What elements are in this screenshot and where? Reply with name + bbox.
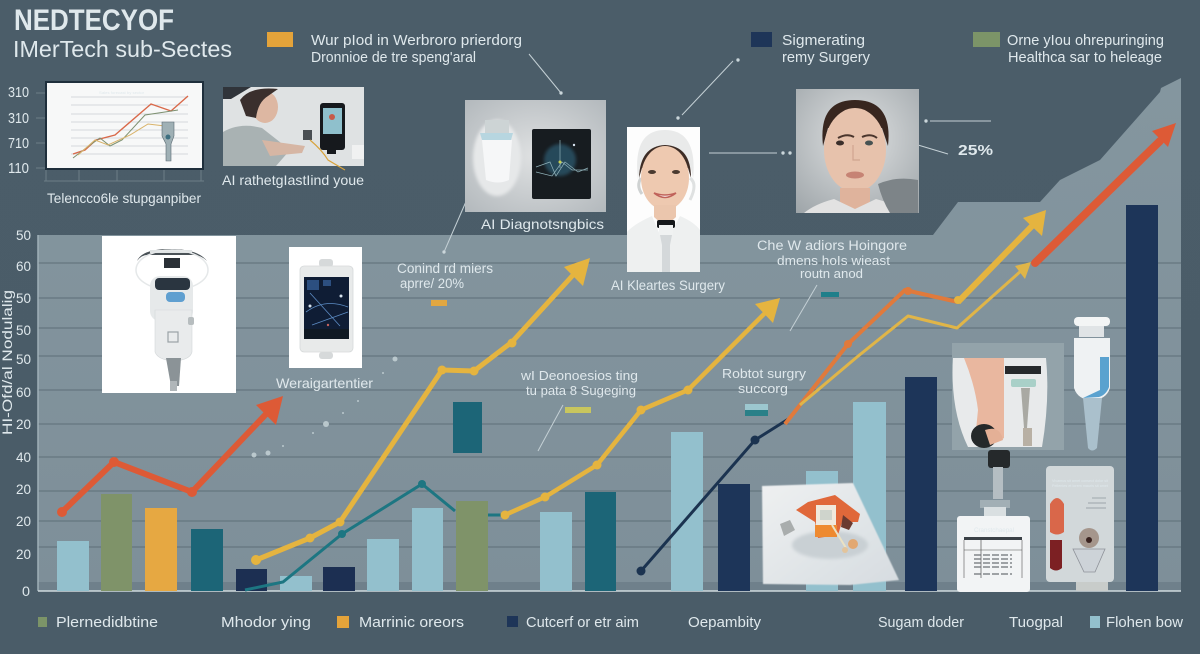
caption: AI diagnostics: AI Diagnotsngbics xyxy=(481,216,604,232)
photo: orange device on sheet xyxy=(762,483,899,585)
photo: product poster: Pellentes et lorem mauris sit amet xyxy=(1052,484,1108,488)
main y axis labels: 0 xyxy=(22,583,30,599)
callout leader lines xyxy=(443,54,991,451)
photo: diagnostics panel xyxy=(465,100,606,212)
callout: upper right note: dmens hoIs wieast xyxy=(777,254,891,268)
callout: diagnostics note: tu pata 8 Sugeging xyxy=(526,383,636,398)
callout: robot surgery note: succorg xyxy=(738,381,788,396)
decorative particles xyxy=(252,356,398,458)
callout: diagnostics note: wI Deonoesios ting xyxy=(520,368,638,383)
arrow: yellow thin trend xyxy=(800,262,1031,405)
callout: robot surgery note xyxy=(722,366,807,396)
photo: pipette device xyxy=(1074,317,1110,450)
legend item: amber: Marrinic oreors xyxy=(359,614,464,631)
photo: patient with phone xyxy=(223,87,364,170)
main y axis labels: 40 xyxy=(16,449,31,465)
line: orange trend xyxy=(785,287,958,424)
bar chart xyxy=(57,205,1158,591)
legend item: plain four: Tuogpal xyxy=(1009,614,1063,631)
callout: twenty percent note xyxy=(397,261,493,291)
caption: patient photo: AI rathetgIastIind youe xyxy=(222,172,364,188)
main y axis labels xyxy=(16,227,31,599)
caption: AI surgery: AI Kleartes Surgery xyxy=(611,277,725,293)
small chart y axis labels: 310 xyxy=(8,110,29,127)
plot area backdrop xyxy=(38,78,1181,591)
main y axis labels: 60 xyxy=(16,258,31,274)
callout: 25 percent: 25% xyxy=(958,142,993,159)
main y axis labels: 20 xyxy=(16,416,31,432)
caption: navigation device: Weraigartentier xyxy=(276,375,373,391)
title xyxy=(13,4,232,62)
main y axis labels: 50 xyxy=(16,290,31,306)
photo: product poster: Vivamus sit amet consect dolor sit xyxy=(1052,479,1108,483)
main y axis labels: 60 xyxy=(16,384,31,400)
callout: twenty percent note: Conind rd miers xyxy=(397,261,493,276)
main y axis labels: 20 xyxy=(16,513,31,529)
arrow: red upper xyxy=(1035,123,1176,263)
photo: data sheet: Cranstchaepal xyxy=(974,527,1015,534)
line: teal trend xyxy=(245,480,505,590)
top legend: amber: Dronnioe de tre speng'aral xyxy=(311,49,476,66)
legend item: olive: Plernedidbtine xyxy=(56,614,158,631)
line: navy trend xyxy=(636,418,790,576)
small chart y axis labels: 710 xyxy=(8,135,29,152)
main y axis labels: 20 xyxy=(16,481,31,497)
top legend: amber: Wur pIod in Werbroro prierdorg xyxy=(311,32,522,49)
small chart y axis labels: 310 xyxy=(8,84,29,101)
small chart panel xyxy=(36,82,204,181)
legend item: plain two: Oepambity xyxy=(688,614,761,631)
photo: data sheet xyxy=(957,516,1030,592)
top legend: navy xyxy=(751,32,870,66)
callout: robot surgery note: Robtot surgry xyxy=(722,366,807,381)
legend item: plain three: Sugam doder xyxy=(878,614,964,631)
small chart y axis labels: 110 xyxy=(8,160,29,177)
title: IMerTech sub-Sectes xyxy=(13,36,232,62)
top legend: amber xyxy=(267,32,522,66)
callout: upper right note: Che W adiors Hoingore xyxy=(757,238,907,253)
photo: telemedicine robot device xyxy=(102,236,236,393)
legend item: navy: Cutcerf or etr aim xyxy=(526,614,639,631)
main y axis labels: 50 xyxy=(16,351,31,367)
main y axis labels: 20 xyxy=(16,546,31,562)
device stem xyxy=(980,450,1010,517)
legend item: light blue: Flohen bow xyxy=(1106,614,1183,631)
top legend: green: Healthca sar to heleage xyxy=(1008,49,1162,66)
photo: smiling nurse xyxy=(627,127,700,272)
arrow: yellow thick upper xyxy=(954,210,1046,304)
photo: foot treatment device xyxy=(952,343,1064,450)
caption: telemedicine: Telencco6le stupganpiber xyxy=(47,190,201,206)
callout: twenty percent note: aprre/ 20% xyxy=(400,276,464,291)
callout: diagnostics note xyxy=(520,368,638,398)
photo: phone with map app xyxy=(289,247,362,368)
callout: upper right note xyxy=(757,238,907,281)
arrow: red trend xyxy=(57,396,283,517)
small chart y axis labels xyxy=(8,84,29,177)
photo: product poster xyxy=(1046,466,1114,591)
top legend: green: Orne yIou ohrepuringing xyxy=(1007,32,1164,49)
arrow: yellow trend one xyxy=(251,258,590,565)
photo: portrait of woman xyxy=(796,89,919,213)
callout: upper right note: routn anod xyxy=(800,267,863,281)
title: NEDTECYOF xyxy=(14,4,174,37)
bottom legend xyxy=(38,614,1183,631)
legend item: plain one: Mhodor ying xyxy=(221,614,311,631)
top legend: navy: Sigmerating xyxy=(782,32,865,49)
small chart panel: Sales forecast by sector xyxy=(99,90,145,95)
top legend: navy: remy Surgery xyxy=(782,49,870,66)
arrow: yellow trend two xyxy=(500,298,780,520)
main y axis labels: 50 xyxy=(16,322,31,338)
main y axis labels: 50 xyxy=(16,227,31,243)
top legend: green xyxy=(973,32,1164,66)
